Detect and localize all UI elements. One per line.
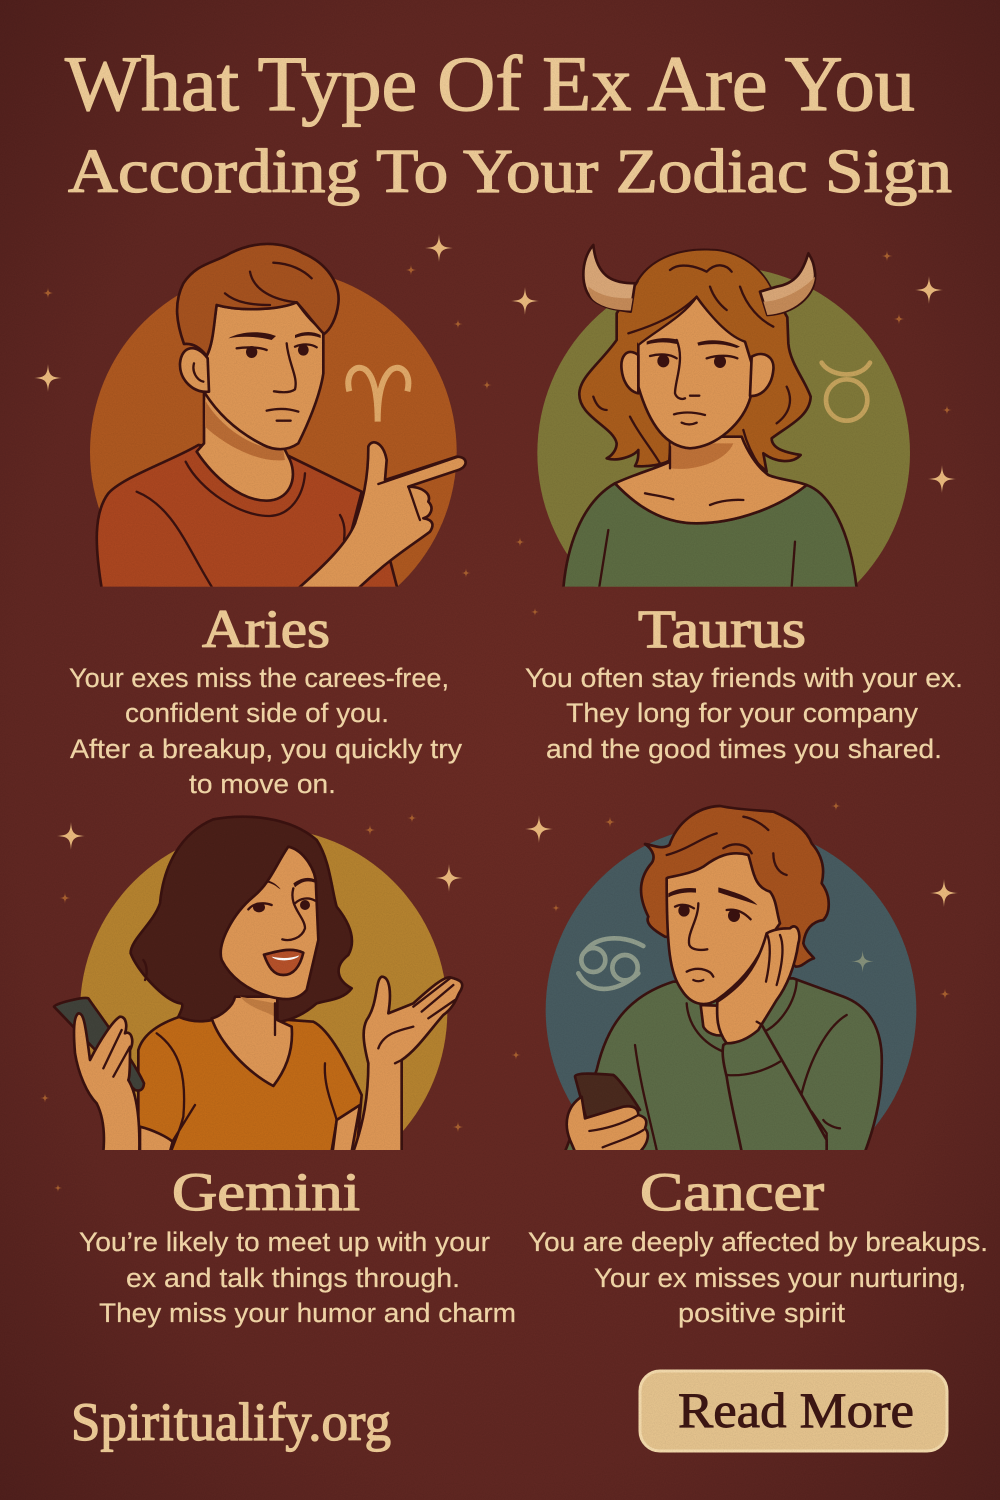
illustration: Aries man pointing — [90, 242, 467, 587]
title: What Type Of Ex Are You — [65, 40, 915, 127]
heading: Cancer: Cancer — [640, 1162, 824, 1222]
text: Cancer description: Your ex misses your nurturing, — [594, 1263, 966, 1293]
title: According To Your Zodiac Sign — [68, 138, 952, 206]
illustration: Cancer man looking sad with phone — [546, 804, 916, 1150]
text: Aries description: confident side of you. — [125, 698, 389, 728]
text: Cancer description: You are deeply affected by breakups. — [528, 1227, 988, 1257]
heading: Gemini: Gemini — [172, 1162, 360, 1222]
text: Cancer description: positive spirit — [678, 1298, 846, 1328]
panel: Aries — [69, 244, 466, 799]
heading: Aries: Aries — [202, 599, 330, 659]
text: Aries description: to move on. — [189, 769, 336, 799]
panel: Gemini — [54, 817, 516, 1328]
text: Taurus description: and the good times you shared. — [546, 734, 942, 764]
text: Cancer description — [528, 1227, 988, 1328]
text: Gemini description: You’re likely to meet up with your — [79, 1227, 490, 1257]
panel: Taurus — [525, 245, 963, 764]
text: Gemini description: They miss your humor and charm — [99, 1298, 516, 1328]
panel: Cancer — [528, 806, 988, 1328]
heading: Taurus: Taurus — [638, 599, 806, 659]
text: Aries description: After a breakup, you quickly try — [70, 734, 463, 764]
text: Taurus description: You often stay friends with your ex. — [525, 663, 963, 693]
title — [65, 40, 952, 206]
text: Taurus description: They long for your company — [566, 698, 919, 728]
button: Read More: Read More — [678, 1382, 914, 1438]
illustration: Gemini woman talking with phone — [52, 815, 464, 1150]
text: Gemini description: ex and talk things through. — [126, 1263, 460, 1293]
text: Taurus description — [525, 663, 963, 764]
illustration: Taurus woman with horns — [537, 244, 910, 587]
text: Aries description: Your exes miss the carees-free, — [69, 663, 449, 693]
text: Aries description — [69, 663, 463, 799]
text: Gemini description — [79, 1227, 516, 1328]
brand: Spiritualify.org: Spiritualify.org — [71, 1392, 391, 1452]
background stars — [34, 234, 958, 1192]
button: Read More — [640, 1371, 947, 1451]
